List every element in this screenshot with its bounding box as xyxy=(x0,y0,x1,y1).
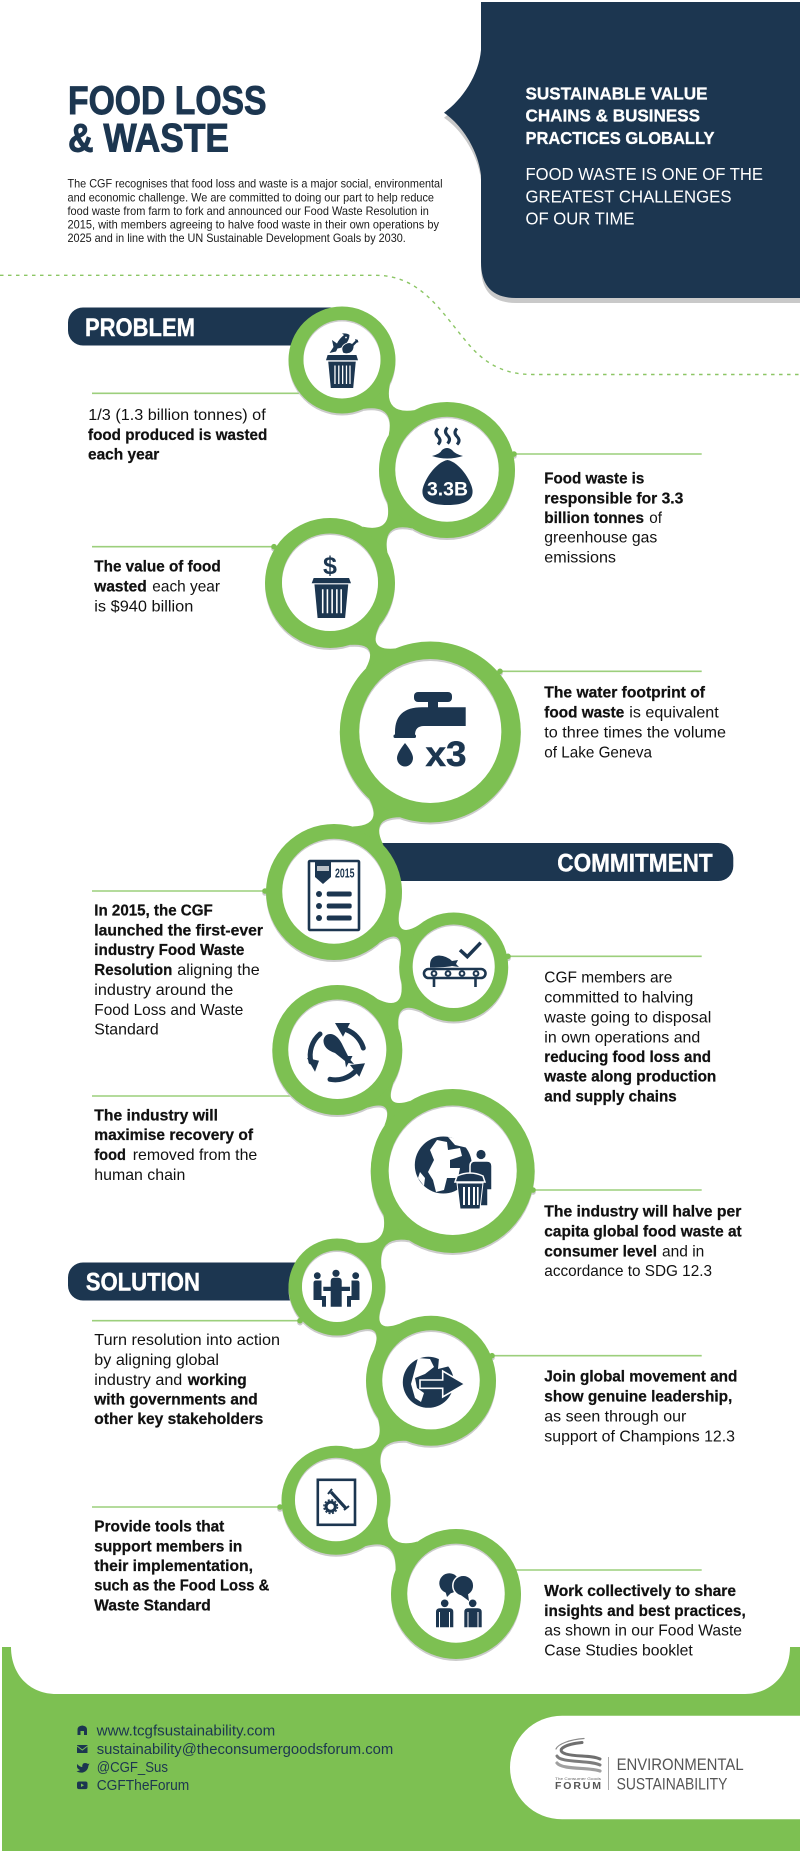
text: halving waste xyxy=(543,970,716,1106)
icon: mail xyxy=(77,1745,88,1753)
text: 2015 resolution: aligning the xyxy=(177,962,260,979)
logo panel: ENVIRONMENTAL xyxy=(617,1755,744,1774)
text: provide tools: Provide tools that xyxy=(94,1518,225,1535)
icon: 3.3B emissions bag: 3.3B xyxy=(427,480,468,500)
title: & WASTE xyxy=(68,117,229,161)
text: maximise recovery: removed from the xyxy=(133,1147,257,1164)
text: provide tools: Waste Standard xyxy=(94,1597,211,1614)
text: greenhouse gas: of xyxy=(649,510,663,527)
text: resolution into action: other key stakeholders xyxy=(94,1411,263,1428)
icon: dollar bin xyxy=(312,552,351,618)
text: work collectively: as shown in our Food Waste xyxy=(544,1623,742,1640)
text: global movement: support of Champions 12.3 xyxy=(544,1428,735,1445)
text: halving waste: reducing food loss and xyxy=(544,1049,711,1066)
intro paragraph: 2015, with members agreeing to halve food waste in their own operations by xyxy=(68,217,439,231)
text: maximise recovery: human chain xyxy=(94,1167,185,1184)
panel: sustainable value chains callout: SUSTAINABLE VALUE xyxy=(526,83,708,103)
text: 2015 resolution: Food Loss and Waste xyxy=(94,1002,243,1019)
icon: people sharing insights xyxy=(436,1573,482,1627)
panel: sustainable value chains callout: CHAINS & BUSINESS xyxy=(526,106,700,126)
icon: video xyxy=(77,1782,88,1789)
text: water footprint: is equivalent xyxy=(629,704,719,721)
heading: solution xyxy=(68,1262,330,1300)
text: work collectively: Case Studies booklet xyxy=(544,1642,693,1659)
text: halving waste: in own operations and xyxy=(544,1029,700,1046)
footer contact list: www.tcgfsustainability.com xyxy=(96,1723,275,1740)
text: halve per capita: consumer level xyxy=(544,1243,657,1260)
footer contact list: @CGF_Sus xyxy=(97,1759,168,1776)
title: FOOD LOSS xyxy=(68,79,266,123)
text: maximise recovery xyxy=(94,1107,257,1184)
icon: meeting around table xyxy=(314,1270,360,1307)
icon: bird xyxy=(76,1763,90,1773)
text: halving waste: CGF members are xyxy=(544,970,672,987)
text: value of food wasted: wasted xyxy=(93,579,147,596)
icon: tools document xyxy=(318,1480,355,1525)
text: resolution into action: Turn resolution into action xyxy=(94,1332,280,1349)
footer contact list xyxy=(76,1723,393,1794)
text: greenhouse gas: responsible for 3.3 xyxy=(544,490,683,507)
logo panel xyxy=(510,1716,800,1819)
icon: dollar bin: $ xyxy=(323,552,337,580)
text: greenhouse gas: billion tonnes xyxy=(544,510,644,527)
icon: 2015 resolution document: 2015 xyxy=(335,867,355,881)
text: resolution into action: industry and xyxy=(94,1372,182,1389)
text: global movement: Join global movement and xyxy=(544,1369,737,1386)
logo panel: SUSTAINABILITY xyxy=(617,1774,727,1793)
green circle chain xyxy=(262,306,536,1659)
intro paragraph: The CGF recognises that food loss and waste is a major social, environmental xyxy=(68,177,442,191)
text: 2015 resolution: launched the first-ever xyxy=(94,923,263,940)
text: global movement: show genuine leadership, xyxy=(544,1389,732,1406)
icon: home xyxy=(78,1726,87,1735)
text: provide tools: such as the Food Loss & xyxy=(94,1578,270,1595)
footer band xyxy=(2,1647,800,1851)
text: halving waste: waste along production xyxy=(543,1069,716,1086)
text: resolution into action xyxy=(93,1332,280,1428)
intro paragraph: 2025 and in line with the UN Sustainable Development Goals by 2030. xyxy=(68,231,406,245)
text: global movement: as seen through our xyxy=(544,1408,687,1425)
text: provide tools: support members in xyxy=(94,1538,242,1555)
intro paragraph xyxy=(68,177,442,245)
text: provide tools: their implementation, xyxy=(94,1558,253,1575)
text: one third wasted: 1/3 (1.3 billion tonnes) of xyxy=(88,407,266,424)
text: 2015 resolution: Resolution xyxy=(94,962,172,979)
logo panel: The Consumer Goods xyxy=(555,1776,601,1781)
panel: sustainable value chains callout: GREATEST CHALLENGES xyxy=(526,186,732,206)
intro paragraph: food waste from farm to fork and announced our Food Waste Resolution in xyxy=(68,204,429,218)
text: 2015 resolution: Standard xyxy=(94,1021,159,1038)
text: resolution into action: by aligning global xyxy=(94,1352,219,1369)
icon: conveyor with chicken and check xyxy=(424,943,486,987)
text: greenhouse gas: emissions xyxy=(544,550,616,567)
text: halving waste: committed to halving xyxy=(544,990,693,1007)
icon: tap x3 xyxy=(394,692,466,774)
text: greenhouse gas: greenhouse gas xyxy=(544,530,657,547)
text: halve per capita xyxy=(544,1204,742,1280)
text: value of food wasted xyxy=(93,559,221,616)
logo panel: FORUM xyxy=(555,1780,601,1792)
text: halving waste: waste going to disposal xyxy=(543,1009,711,1026)
text: water footprint: to three times the volume xyxy=(544,724,726,741)
panel: sustainable value chains callout: FOOD WASTE IS ONE OF THE xyxy=(526,164,763,184)
text: greenhouse gas: Food waste is xyxy=(544,470,644,487)
text: maximise recovery: maximise recovery of xyxy=(94,1127,254,1144)
text: one third wasted: food produced is wasted xyxy=(88,427,267,444)
icon: 3.3B emissions bag xyxy=(422,428,473,505)
heading: solution: SOLUTION xyxy=(86,1269,200,1297)
heading: problem: PROBLEM xyxy=(85,314,195,342)
text: halve per capita: and in xyxy=(662,1243,704,1260)
text: halve per capita: The industry will halve per xyxy=(544,1204,741,1221)
intro paragraph: and economic challenge. We are committed to doing our part to help reduce xyxy=(68,190,434,204)
icon: globe with arrow xyxy=(403,1357,465,1408)
footer contact list: sustainability@theconsumergoodsforum.com xyxy=(97,1741,393,1758)
text: resolution into action: working xyxy=(187,1372,247,1389)
panel: sustainable value chains callout xyxy=(444,2,800,303)
text: work collectively xyxy=(544,1583,746,1659)
text: 2015 resolution xyxy=(94,903,263,1038)
text: 2015 resolution: industry Food Waste xyxy=(94,942,244,959)
icon: 2015 resolution document xyxy=(309,860,359,930)
icon: tap x3: x3 xyxy=(426,735,466,774)
panel: sustainable value chains callout: PRACTICES GLOBALLY xyxy=(526,128,715,148)
text: resolution into action: with governments and xyxy=(93,1391,258,1408)
text: global movement xyxy=(544,1369,737,1445)
text: work collectively: Work collectively to share xyxy=(544,1583,736,1600)
text: halve per capita: capita global food waste at xyxy=(544,1223,742,1240)
heading: commitment: COMMITMENT xyxy=(557,850,713,878)
icon: food in bin xyxy=(326,333,359,388)
heading: commitment xyxy=(360,843,733,881)
title xyxy=(68,79,266,161)
text: halving waste: and supply chains xyxy=(544,1089,677,1106)
text: value of food wasted: each year xyxy=(152,579,221,596)
footer contact list: CGFTheForum xyxy=(97,1777,189,1794)
text: greenhouse gas xyxy=(544,470,683,567)
text: water footprint: food waste xyxy=(544,704,624,721)
text: water footprint: of Lake Geneva xyxy=(544,744,652,761)
text: water footprint: The water footprint of xyxy=(544,685,706,702)
icon: recovery arrows and drumstick xyxy=(307,1023,365,1080)
text: provide tools xyxy=(94,1518,270,1614)
panel: sustainable value chains callout: OF OUR TIME xyxy=(526,209,634,229)
text: halve per capita: accordance to SDG 12.3 xyxy=(544,1263,712,1280)
text: one third wasted xyxy=(88,407,267,464)
text: one third wasted: each year xyxy=(88,446,159,464)
text: 2015 resolution: industry around the xyxy=(94,982,233,999)
text: water footprint xyxy=(544,685,726,761)
text: value of food wasted: The value of food xyxy=(94,559,221,576)
text: 2015 resolution: In 2015, the CGF xyxy=(94,903,213,920)
icon: globe with person and bin xyxy=(415,1136,492,1209)
text: maximise recovery: food xyxy=(94,1147,126,1164)
text: value of food wasted: is $940 billion xyxy=(94,599,193,616)
text: work collectively: insights and best practices, xyxy=(544,1603,746,1620)
text: maximise recovery: The industry will xyxy=(94,1107,218,1124)
heading: problem xyxy=(68,308,342,346)
